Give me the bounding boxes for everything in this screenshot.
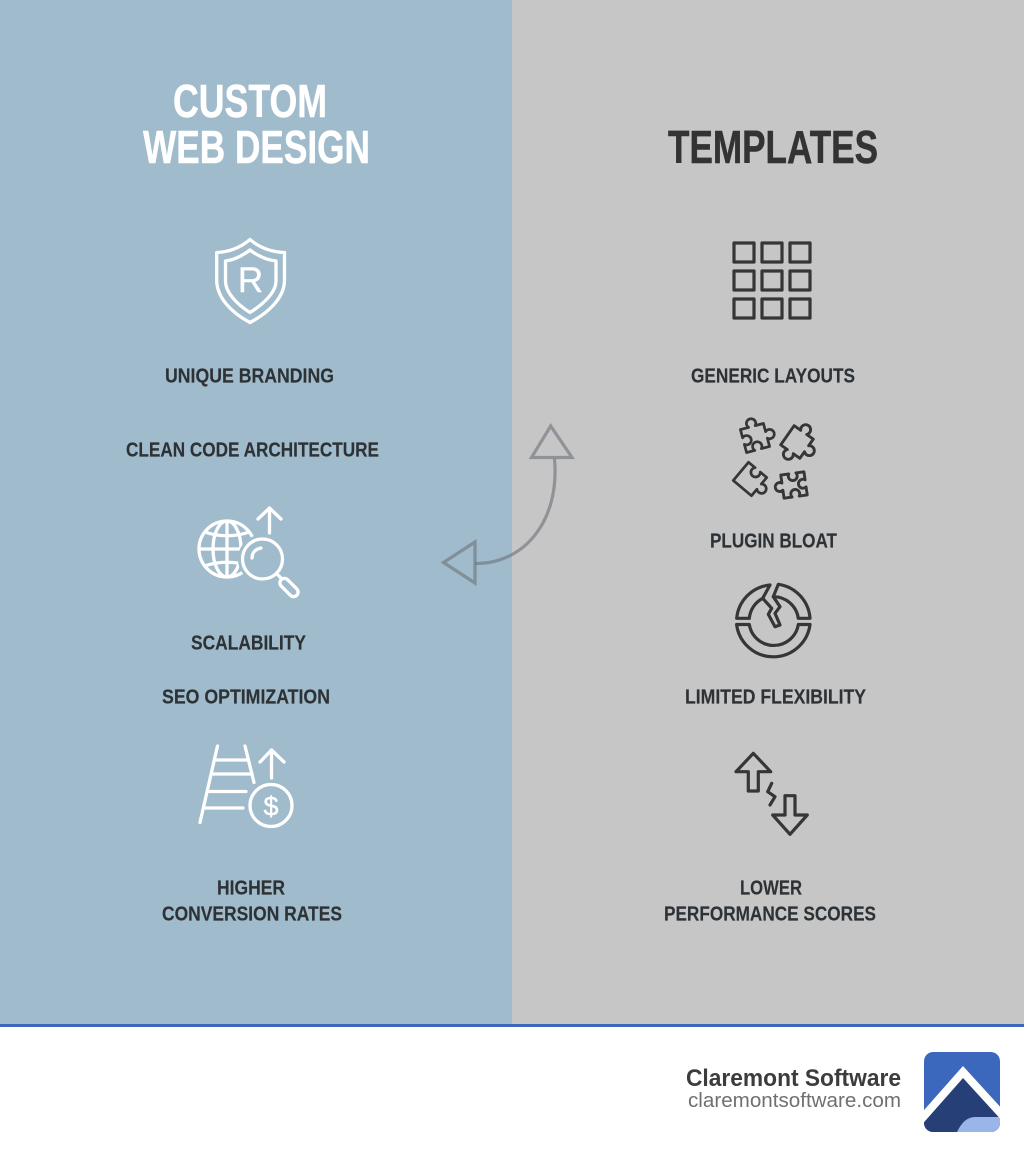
label: generic layouts: GENERIC LAYOUTS [691,364,855,388]
label: scalability: SCALABILITY [191,632,306,654]
brand url: claremontsoftware.com [688,1090,901,1112]
label: plugin bloat: PLUGIN BLOAT [710,530,837,552]
icon: up and down arrows [736,753,807,834]
icon: claremont logo [924,1052,1000,1132]
label: lower performance scores [664,876,876,926]
label: unique branding: UNIQUE BRANDING [165,364,334,388]
label: higher conversion rates: HIGHER [217,876,285,900]
icon: globe with magnifier and up arrow [199,508,300,598]
label: seo optimization: SEO OPTIMIZATION [162,686,330,708]
icon: broken ring [737,584,810,657]
label: clean code architecture: CLEAN CODE ARCHITECTURE [126,438,379,462]
label: lower performance scores: LOWER [740,876,802,900]
brand name: Claremont Software [686,1065,901,1092]
footer divider [0,1024,1024,1027]
arrow: curved double-headed comparison arrow [444,426,572,583]
icon: ladder with dollar coin: $ [263,792,279,822]
heading: templates: TEMPLATES [668,121,878,173]
label: higher conversion rates [162,876,342,926]
panel: custom web design [0,0,512,1024]
label: limited flexibility: LIMITED FLEXIBILITY [685,686,866,708]
icon: shield with R: R [238,261,263,300]
heading: custom web design: CUSTOM [173,75,327,127]
icon: template grid [734,243,810,318]
panel: templates [512,0,1024,1024]
icon: ladder with dollar coin [200,746,292,826]
label: lower performance scores: PERFORMANCE SCORES [664,902,876,926]
icon: shield with R [217,240,284,322]
heading: custom web design [143,75,370,173]
icon: puzzle pieces [733,414,825,501]
heading: custom web design: WEB DESIGN [143,121,370,173]
label: higher conversion rates: CONVERSION RATES [162,902,342,926]
